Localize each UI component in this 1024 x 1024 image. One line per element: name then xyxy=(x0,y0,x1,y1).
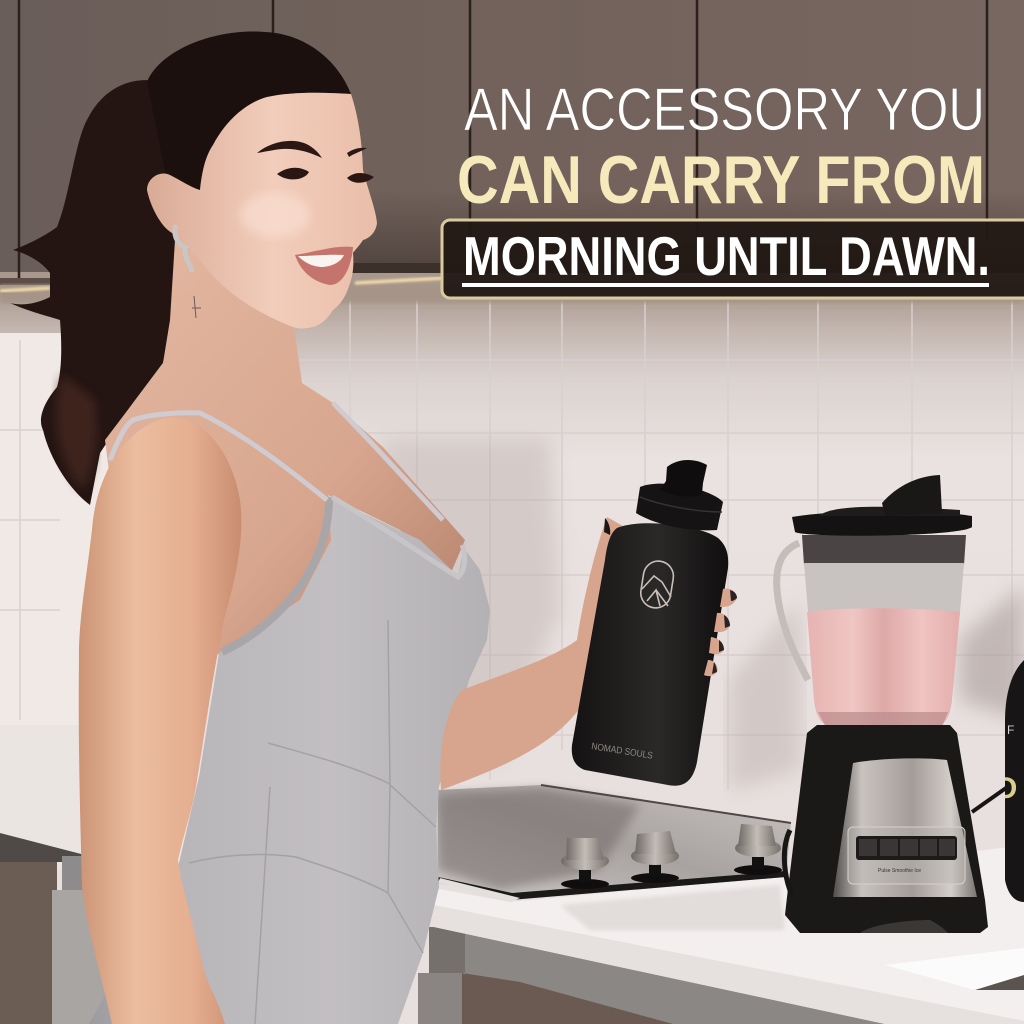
lower cabinets and left counter xyxy=(0,725,900,1024)
stove knob 3 xyxy=(734,824,782,875)
fingers xyxy=(604,518,737,676)
headline banner xyxy=(442,220,1024,298)
eyebrow and eye xyxy=(257,141,374,183)
control label panel: Pulse Smoothie Ice xyxy=(878,868,921,874)
bottle lid xyxy=(636,484,723,530)
bottle logo xyxy=(639,559,676,610)
grey dress xyxy=(89,495,490,1024)
steel panel xyxy=(833,758,977,897)
stove knob 1 xyxy=(561,838,609,889)
jar lid xyxy=(792,511,972,536)
smoothie xyxy=(807,608,960,727)
stove knob 2 xyxy=(631,831,679,883)
smile xyxy=(295,247,353,285)
power cord xyxy=(972,788,1006,812)
raised arm near camera xyxy=(79,417,241,1024)
bottle brand: NOMAD SOULS xyxy=(591,741,653,762)
motor base xyxy=(785,725,988,933)
protein canister: O xyxy=(994,772,1017,805)
blender xyxy=(777,475,1006,933)
banner underline xyxy=(462,283,989,287)
neck and chest xyxy=(105,240,465,655)
dress straps xyxy=(110,403,443,520)
control label panel xyxy=(848,827,965,884)
water bottle xyxy=(572,460,737,786)
protein canister: F xyxy=(1007,723,1014,737)
glass jar xyxy=(802,535,966,727)
woman xyxy=(10,32,630,1024)
ponytail and hair xyxy=(10,32,351,505)
earring xyxy=(175,225,192,272)
glass stove xyxy=(438,785,791,902)
neck tattoo xyxy=(192,296,201,318)
tiled wall xyxy=(0,270,1024,790)
protein canister xyxy=(1005,660,1024,902)
face xyxy=(147,93,377,329)
foam xyxy=(804,563,964,612)
forearm and hand xyxy=(440,517,630,790)
control buttons xyxy=(856,836,957,860)
countertop xyxy=(434,845,1024,1024)
jar handle xyxy=(777,543,808,680)
upper cabinets xyxy=(0,0,1024,303)
